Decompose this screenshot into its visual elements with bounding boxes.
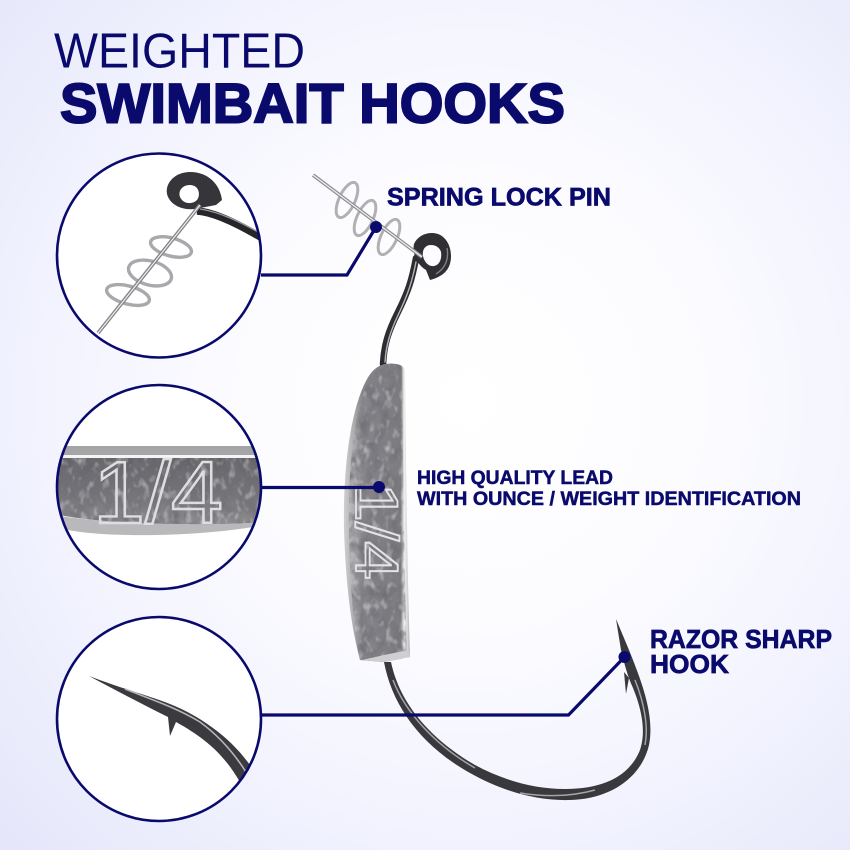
leader line: hook point xyxy=(262,651,630,715)
closeup circle background xyxy=(57,385,261,589)
leader line: lead weight xyxy=(262,481,385,493)
label: lead weight xyxy=(417,468,801,510)
title xyxy=(54,24,565,134)
panel: hook point closeup xyxy=(57,617,261,821)
label: lead weight: HIGH QUALITY LEAD xyxy=(417,468,613,489)
closeup: lead bar with 1/4 xyxy=(58,446,260,536)
closeup circle outline xyxy=(57,154,261,358)
embossed 1/4 marking on lead: 1/4 xyxy=(343,483,410,580)
panel: spring lock pin closeup xyxy=(57,154,262,358)
leader line: spring lock pin xyxy=(261,221,382,275)
label: lead weight: WITH OUNCE / WEIGHT IDENTIFICATION xyxy=(417,489,801,510)
label: razor sharp hook: RAZOR SHARP xyxy=(650,624,832,654)
shank wire xyxy=(383,258,416,364)
lead weight body xyxy=(344,364,410,662)
title line: swimbait hooks: SWIMBAIT HOOKS xyxy=(60,72,565,134)
title line: weighted: WEIGHTED xyxy=(54,24,305,78)
closeup circle background xyxy=(57,154,261,358)
main product: weighted hook xyxy=(313,175,650,800)
label: razor sharp hook: HOOK xyxy=(650,649,729,679)
label: spring lock pin: SPRING LOCK PIN xyxy=(387,184,611,212)
label: razor sharp hook xyxy=(650,624,832,679)
closeup circle outline xyxy=(57,617,261,821)
hook bend and point xyxy=(384,619,650,800)
closeup circle background xyxy=(57,617,261,821)
closeup: hook point and barb xyxy=(89,676,252,784)
hook eye xyxy=(414,233,451,280)
panel: lead weight closeup xyxy=(55,385,265,589)
closeup: hook eye and spring xyxy=(98,172,262,333)
spring lock pin xyxy=(313,175,422,258)
closeup circle outline xyxy=(57,385,261,589)
closeup: lead bar with 1/4: 1/4 xyxy=(93,443,223,542)
